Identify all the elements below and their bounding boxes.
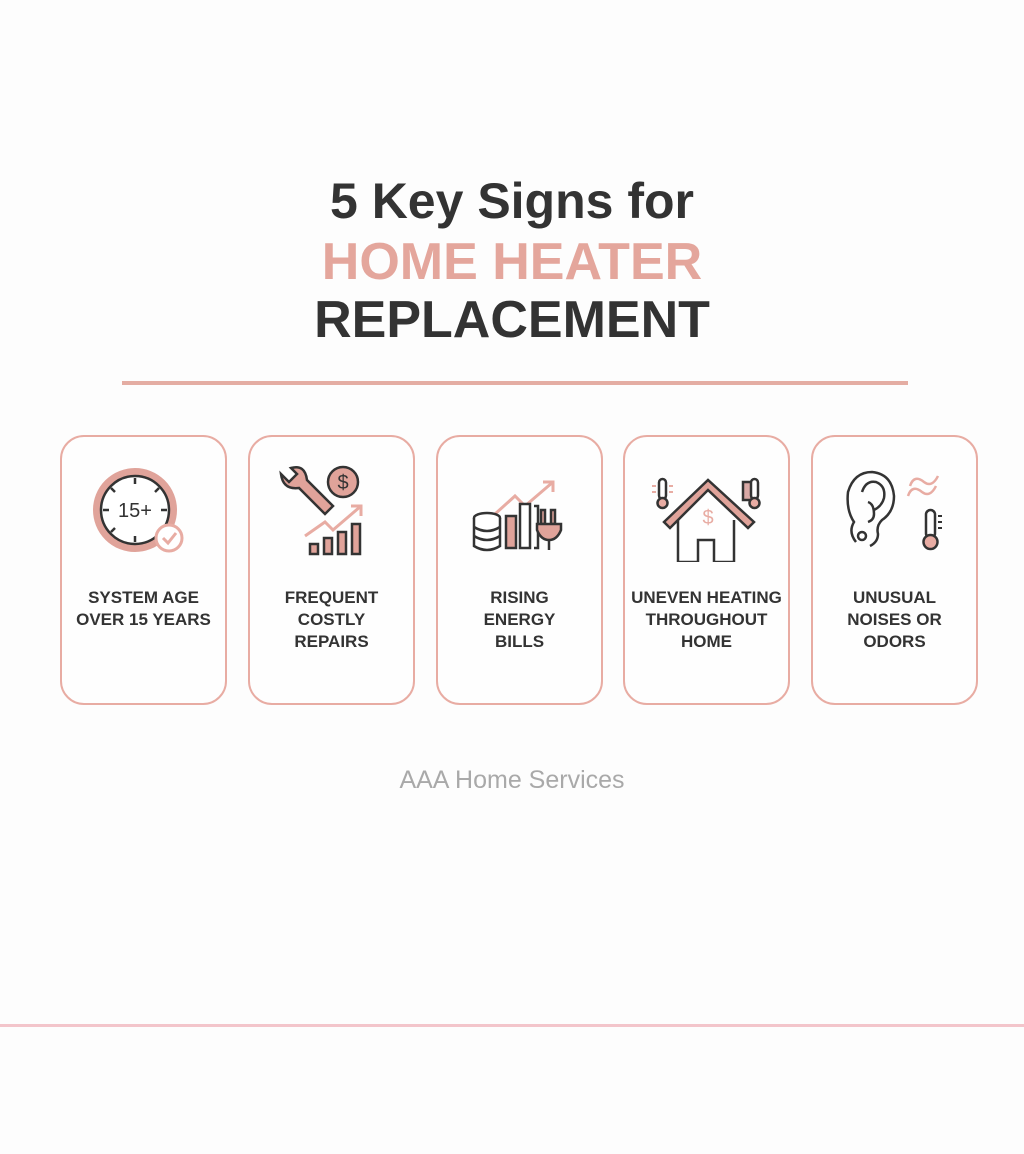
label: NOISES OR (847, 610, 942, 629)
title: HOME HEATER (322, 233, 702, 291)
label (285, 588, 378, 651)
icon: wrench, dollar, chart (279, 466, 362, 556)
label: ODORS (863, 632, 926, 651)
icon: coins, bars, plug (472, 480, 562, 552)
panel: repairs (248, 435, 415, 705)
label: OVER 15 YEARS (76, 610, 211, 629)
label (847, 588, 942, 651)
label: REPAIRS (294, 632, 369, 651)
label: SYSTEM AGE (88, 588, 199, 607)
label: HOME (681, 632, 732, 651)
label: UNEVEN HEATING (631, 588, 782, 607)
title: 5 Key Signs for (330, 173, 694, 229)
label: BILLS (495, 632, 544, 651)
icon: clock 15+: 15+ (118, 500, 152, 522)
icon: clock 15+ (93, 468, 184, 552)
icon: house with thermometers (652, 478, 761, 562)
icon: ear, smell wave, thermometer (846, 470, 942, 550)
label: THROUGHOUT (646, 610, 767, 629)
label (631, 588, 782, 651)
label: COSTLY (298, 610, 365, 629)
label: UNUSUAL (853, 588, 936, 607)
label (484, 588, 555, 651)
footer brand: AAA Home Services (399, 766, 625, 794)
title: REPLACEMENT (314, 291, 710, 349)
label (76, 588, 211, 629)
label: RISING (490, 588, 549, 607)
panel: system age (60, 435, 227, 705)
panel: uneven heating (623, 435, 790, 705)
label: FREQUENT (285, 588, 378, 607)
title (314, 173, 710, 349)
icon: house with thermometers: $ (702, 507, 714, 529)
panel: energy bills (436, 435, 603, 705)
label: ENERGY (484, 610, 555, 629)
icon: wrench, dollar, chart: $ (337, 472, 349, 494)
panel: noises or odors (811, 435, 978, 705)
